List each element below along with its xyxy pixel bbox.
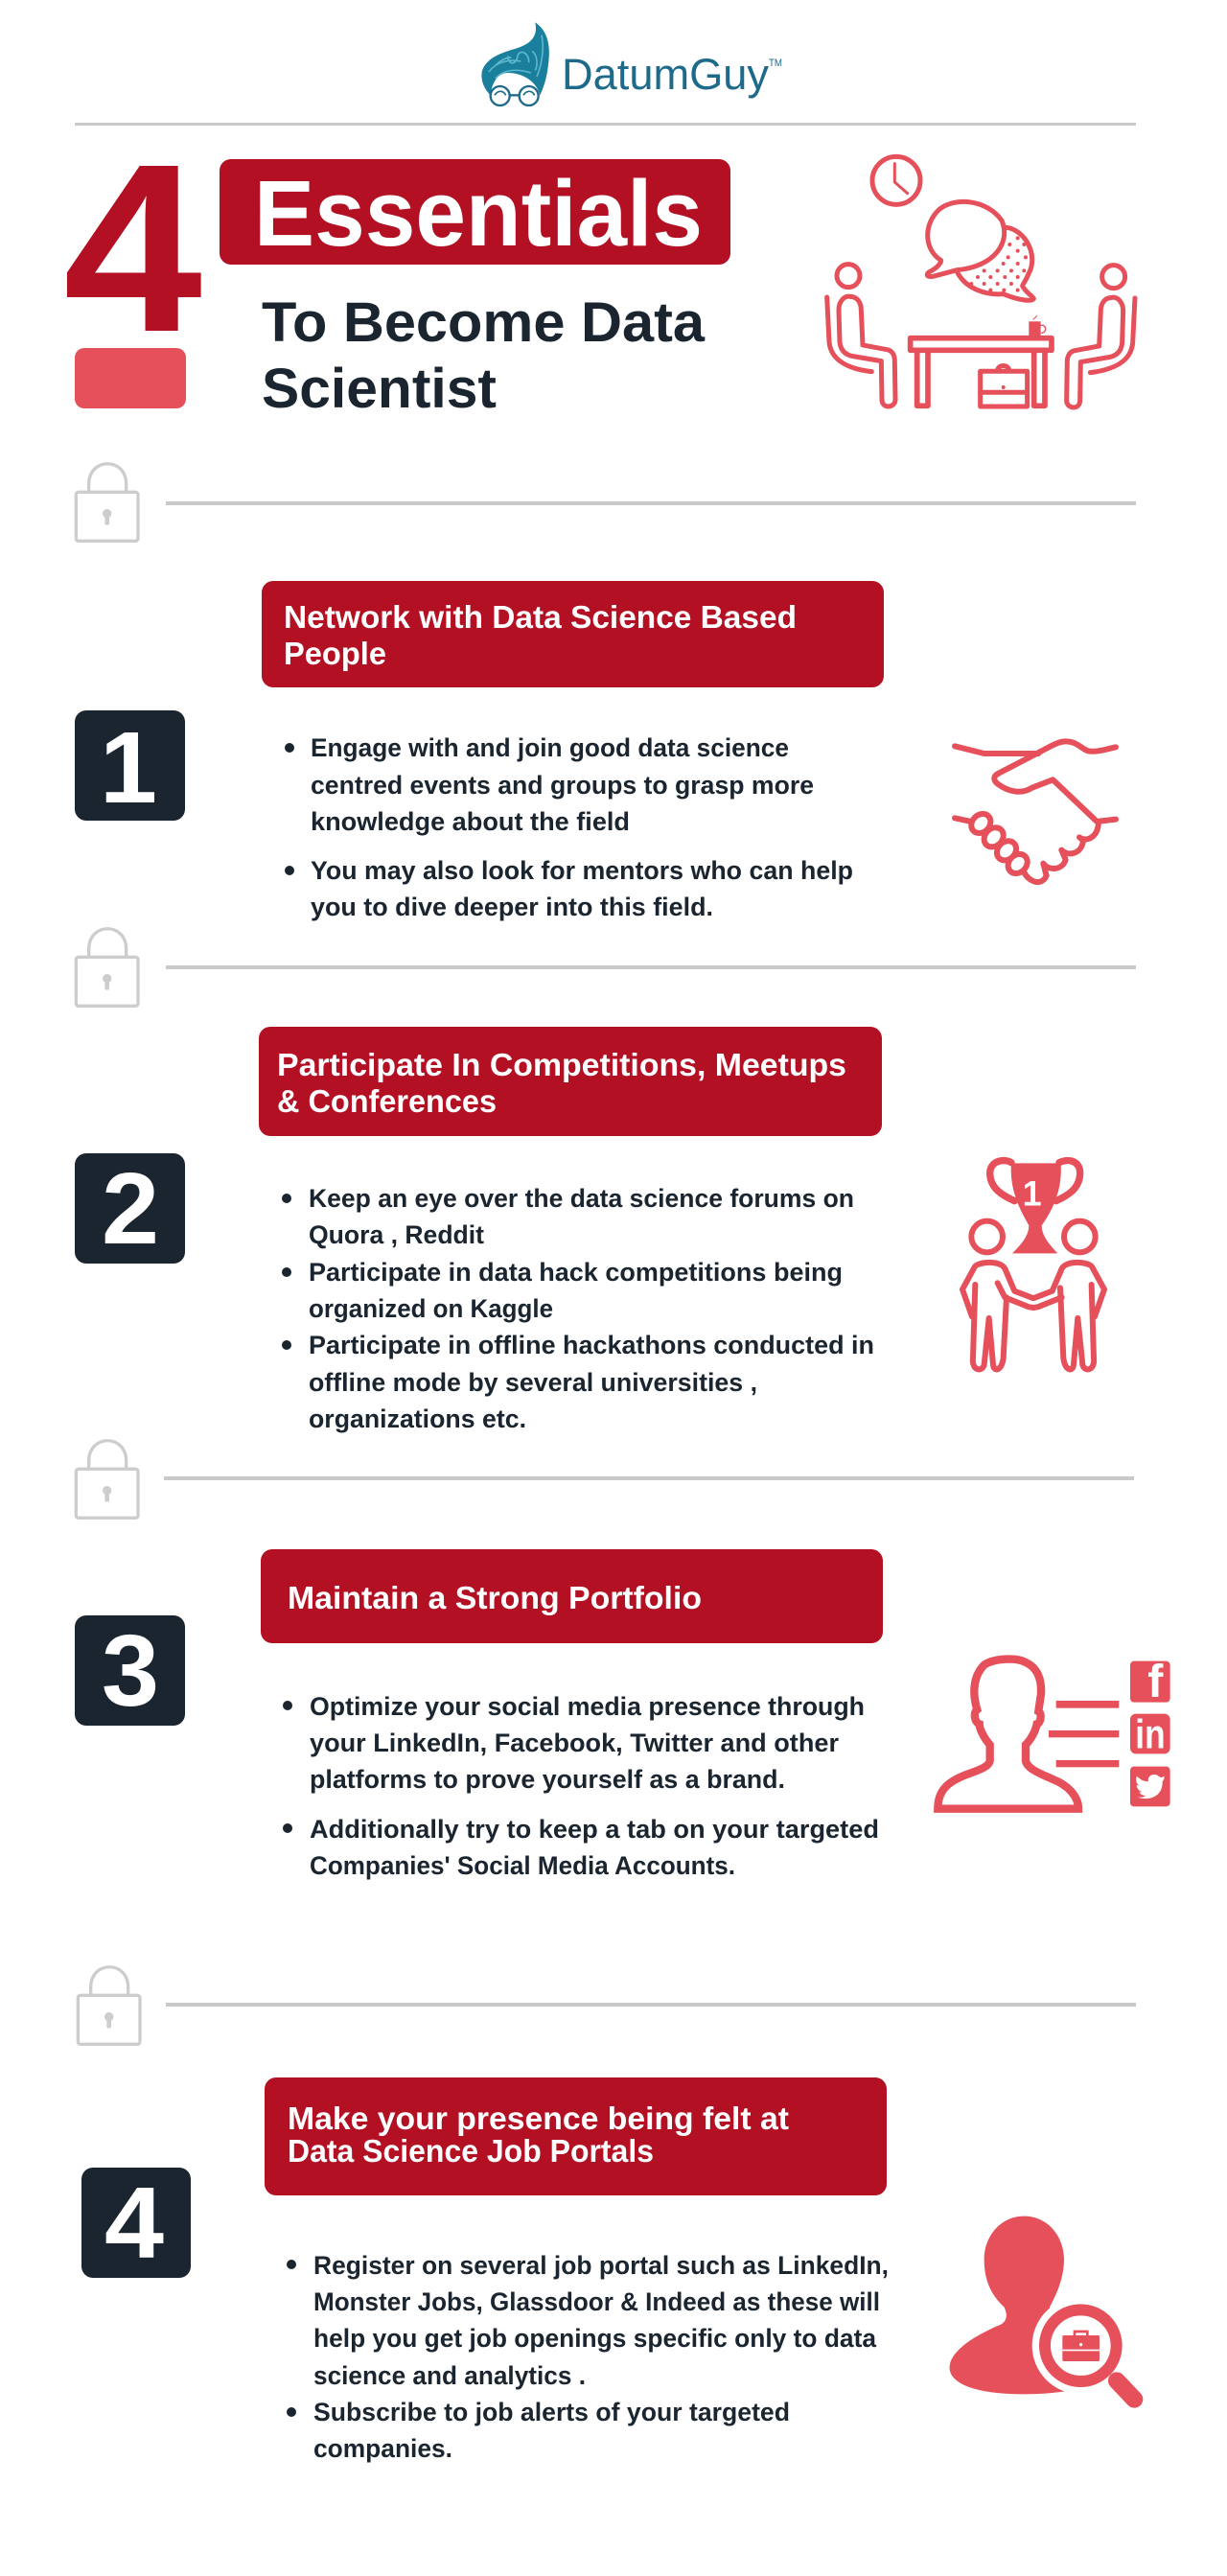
subtitle: Scientist [262,358,497,420]
heading: step 2: Participate In Competitions, Meetups [277,1047,846,1082]
heading: step 4 [265,2077,887,2195]
text block: step 2 bullets: organizations etc. [309,1404,526,1433]
text block: step 4 bullets: Register on several job portal such as LinkedIn, [313,2251,889,2280]
icon: profile with social media [938,1656,1170,1809]
trademark: TM [769,58,782,69]
text block: step 3 bullets: Companies' Social Media Accounts. [310,1851,735,1880]
text block: step 4 bullets: help you get job openings specific only to data [313,2324,877,2353]
number badge 1: 1 [100,711,157,824]
text block: step 2 bullets: Participate in data hack competitions being [309,1258,843,1287]
text block: step 2 bullets: offline mode by several universities , [309,1368,757,1397]
icon: lock 4 [78,1967,140,2044]
text block: step 1 bullets: centred events and groups to grasp more [311,771,814,800]
heading: step 4: Data Science Job Portals [288,2133,654,2169]
text block: step 2 bullets: Quora , Reddit [309,1220,484,1249]
icon: lock 2 [76,929,138,1006]
title banner: Essentials [254,161,703,266]
icon: lock 1 [76,464,138,541]
icon: meeting at table [827,156,1135,407]
big number 4: 4 [63,114,202,382]
text block: step 4 bullets: science and analytics . [313,2361,586,2390]
heading: step 1: People [284,636,386,671]
text block: step 2 bullets: organized on Kaggle [309,1294,553,1323]
heading: step 4: Make your presence being felt at [288,2100,789,2136]
text block: step 3 bullets: your LinkedIn, Facebook, Twitter and other [310,1729,839,1757]
text block: step 2 bullets: Keep an eye over the data science forums on [309,1184,854,1213]
subtitle [262,291,706,420]
title block [63,114,730,420]
panel: step 2 competitions [75,1027,1104,1433]
number badge 2: 2 [102,1152,159,1265]
number badge 4: 4 [104,2167,164,2280]
text block: step 3 bullets: Additionally try to keep a tab on your targeted [310,1815,879,1844]
heading: step 1 [262,581,884,687]
icon: profile with social media: f [1147,1656,1164,1707]
panel: step 1 network [75,581,1116,921]
text block: step 1 bullets [285,733,853,921]
icon: person with magnifier and briefcase [950,2216,1134,2400]
text block: step 1 bullets: you to dive deeper into this field. [311,893,713,921]
number badge 1 [75,710,185,824]
subtitle: To Become Data [262,291,706,354]
number badge 4 [81,2167,191,2280]
heading: step 2: & Conferences [277,1083,497,1119]
icon: trophy and two people: 1 [1023,1173,1042,1213]
text block: step 3 bullets [283,1692,879,1880]
text block: step 4 bullets [287,2251,889,2463]
text block: step 1 bullets: knowledge about the field [311,807,630,836]
icon: trophy and two people [962,1161,1104,1369]
heading: step 2 [259,1027,882,1136]
number badge 3 [75,1614,185,1728]
icon: hair and glasses [481,22,549,105]
logo: DatumGuy [481,22,782,105]
text block: step 2 bullets: Participate in offline hackathons conducted in [309,1331,874,1359]
panel: step 4 job portals [81,2077,1134,2463]
text block: step 3 bullets: Optimize your social media presence through [310,1692,865,1721]
logo wordmark: DatumGuy [562,50,769,99]
icon: profile with social media: in [1135,1711,1166,1757]
icon: lock 3 [76,1441,138,1518]
number badge 3: 3 [102,1614,159,1728]
text block: step 4 bullets: companies. [313,2434,452,2463]
text block: step 3 bullets: platforms to prove yourself as a brand. [310,1765,785,1794]
text block: step 2 bullets [282,1184,874,1433]
text block: step 4 bullets: Monster Jobs, Glassdoor & Indeed as these will [313,2287,880,2316]
heading: step 3: Maintain a Strong Portfolio [288,1580,702,1615]
text block: step 1 bullets: You may also look for mentors who can help [311,856,853,885]
heading: step 3 [261,1549,883,1643]
icon: handshake [955,741,1116,882]
text block: step 4 bullets: Subscribe to job alerts of your targeted [313,2398,790,2426]
text block: step 1 bullets: Engage with and join good data science [311,733,789,762]
pink accent block [75,348,186,408]
panel: step 3 portfolio [75,1549,1170,1880]
heading: step 1: Network with Data Science Based [284,599,797,635]
number badge 2 [75,1152,185,1265]
